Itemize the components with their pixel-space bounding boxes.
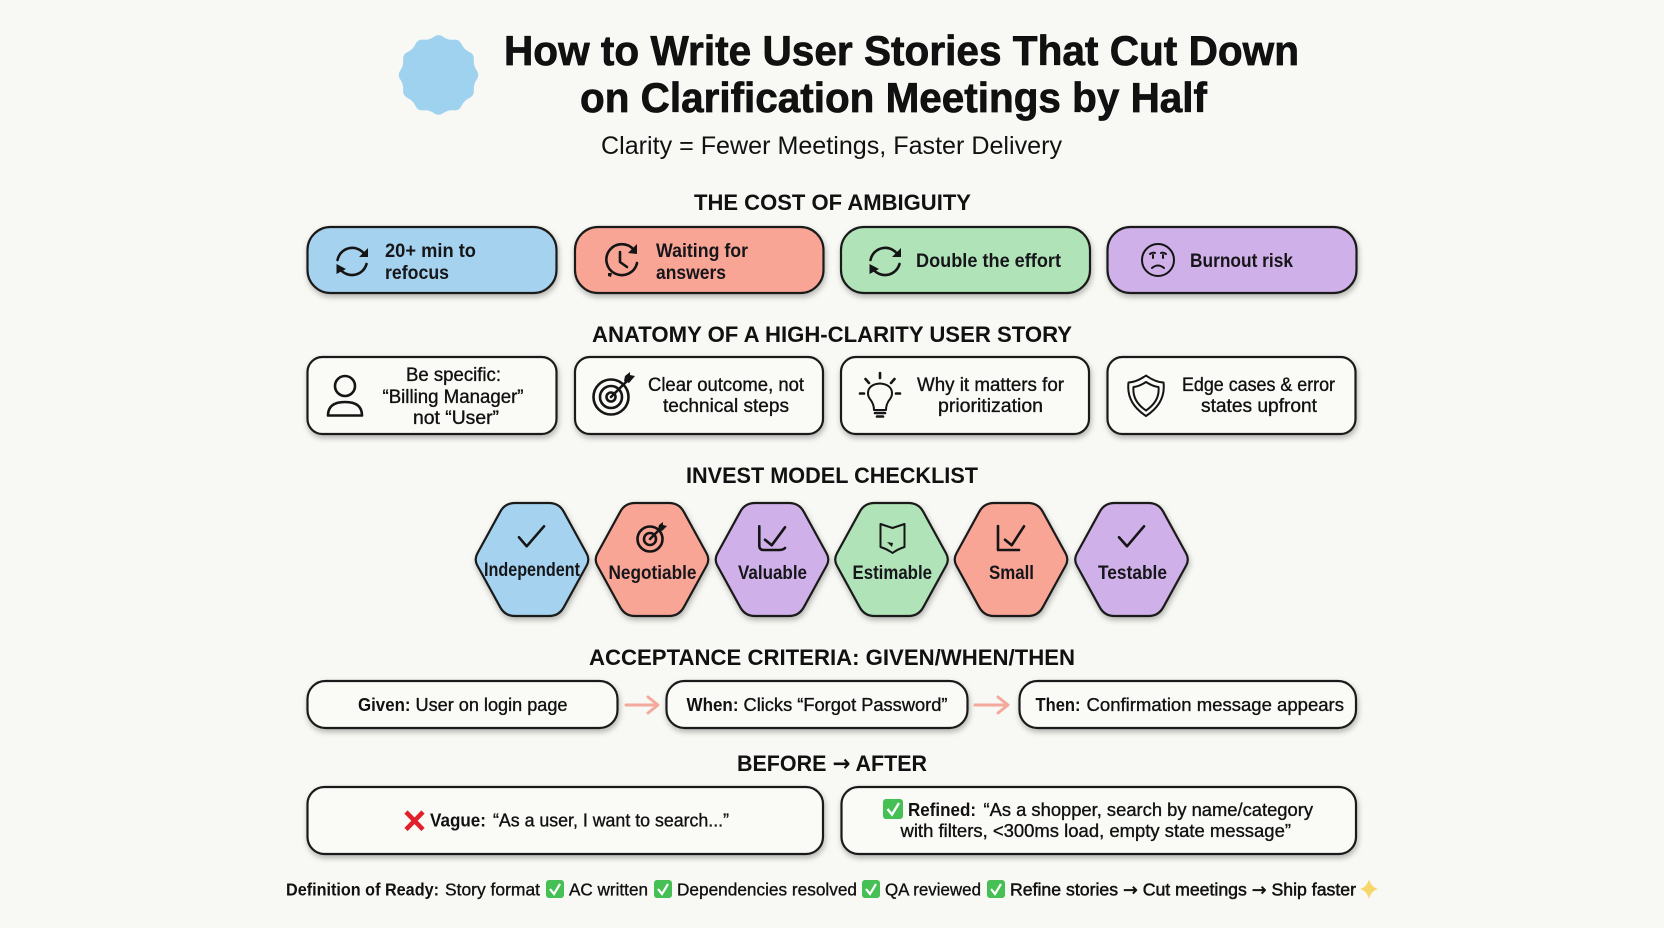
label: refocus (385, 262, 449, 284)
hexagon: testable (1075, 503, 1188, 616)
footer: definition of ready: Story format (445, 880, 540, 900)
panel: invest hexagons (476, 503, 1188, 616)
icon: sparkle (1360, 879, 1378, 899)
icon: green check (654, 880, 672, 898)
label: Testable (1098, 562, 1167, 584)
icon: chart check (759, 526, 785, 550)
box: refined (842, 787, 1356, 854)
label: Vague: (430, 810, 486, 830)
arrow: when to then (975, 697, 1008, 713)
label (1182, 375, 1336, 417)
label: prioritization (938, 396, 1043, 417)
pill: double the effort (841, 227, 1090, 293)
icon: check (1119, 526, 1144, 546)
label: “Billing Manager” (382, 387, 524, 408)
title (504, 27, 1299, 121)
footer: definition of ready: AC written (569, 880, 648, 900)
label: Double the effort (916, 250, 1061, 272)
icon: red cross (406, 812, 423, 830)
footer: definition of ready (286, 879, 1378, 900)
footer: definition of ready: Dependencies resolved (677, 880, 857, 900)
label: Burnout risk (1190, 250, 1293, 272)
card: edge cases (1108, 357, 1356, 434)
arrow: given to when (626, 697, 658, 713)
card: why it matters (841, 357, 1089, 434)
label: with filters, <300ms load, empty state message” (900, 820, 1291, 841)
label: Given: (358, 694, 410, 715)
label: Clicks “Forgot Password” (744, 694, 948, 715)
footer: definition of ready: Definition of Ready: (286, 880, 439, 900)
icon: green check (546, 880, 564, 898)
title: How to Write User Stories That Cut Down (504, 27, 1299, 74)
label: answers (656, 262, 726, 284)
pill: 20+ min to refocus (308, 227, 556, 293)
label: “As a user, I want to search...” (493, 810, 729, 830)
label: Clear outcome, not (648, 375, 805, 396)
box: then (1020, 681, 1356, 728)
heading: the cost of ambiguity: THE COST OF AMBIGUITY (694, 190, 971, 215)
label: Independent (484, 559, 580, 581)
icon: target (594, 372, 635, 414)
label: Refined: (908, 799, 976, 820)
heading: before after: BEFORE → AFTER (737, 751, 927, 777)
label (648, 375, 805, 417)
label: “As a shopper, search by name/category (984, 799, 1314, 820)
icon: bookmark shield (880, 524, 904, 553)
label: Negotiable (608, 562, 697, 584)
icon: light bulb (860, 373, 900, 416)
title: on Clarification Meetings by Half (580, 74, 1208, 121)
label (385, 240, 476, 284)
label: Small (989, 562, 1034, 584)
icon: sad face (1142, 244, 1174, 276)
heading: acceptance criteria: ACCEPTANCE CRITERIA: GIVEN/WHEN/THEN (589, 645, 1075, 670)
icon: green check (883, 799, 903, 819)
box: when (666, 681, 968, 728)
label: not “User” (413, 408, 499, 429)
icon: check (519, 526, 544, 546)
hexagon: estimable (835, 503, 948, 616)
card: clear outcome (575, 357, 823, 434)
hexagon: valuable (716, 503, 828, 616)
icon: person (328, 376, 362, 416)
label (900, 799, 1314, 841)
heading: invest: INVEST MODEL CHECKLIST (686, 463, 978, 488)
label (656, 240, 748, 284)
label (382, 365, 524, 429)
icon: green check (862, 880, 880, 898)
footer: definition of ready: QA reviewed (885, 880, 981, 900)
panel: cost of ambiguity pills (308, 227, 1356, 293)
hexagon: small (955, 503, 1067, 616)
heading: anatomy: ANATOMY OF A HIGH-CLARITY USER STORY (592, 322, 1072, 347)
panel: anatomy cards (308, 357, 1356, 434)
footer: definition of ready: Refine stories → Cut meetings → Ship faster (1010, 880, 1356, 900)
label: Edge cases & error (1182, 375, 1336, 396)
icon: blue scalloped badge (399, 35, 478, 115)
label: Estimable (852, 562, 932, 584)
pill: waiting for answers (575, 227, 824, 293)
box: given (308, 681, 618, 728)
icon: refresh arrows (870, 248, 901, 275)
panel: before after (308, 787, 1356, 854)
label: Be specific: (406, 365, 501, 386)
label: Valuable (738, 562, 807, 584)
icon: clock with arrow (606, 244, 637, 277)
label: technical steps (663, 396, 789, 417)
label: 20+ min to (385, 240, 476, 262)
box: vague (308, 787, 823, 854)
icon: chart check (998, 526, 1024, 550)
label: When: (686, 694, 738, 715)
label: states upfront (1201, 396, 1318, 417)
icon: refresh arrows (336, 248, 368, 275)
panel: given when then flow (308, 681, 1356, 728)
label: Waiting for (656, 240, 748, 262)
label: Why it matters for (917, 375, 1065, 396)
label: Then: (1036, 694, 1080, 715)
label: Confirmation message appears (1086, 694, 1344, 715)
hexagon: independent (476, 503, 588, 616)
label (917, 375, 1065, 417)
card: be specific (308, 357, 556, 434)
label: User on login page (416, 694, 568, 715)
subtitle: Clarity = Fewer Meetings, Faster Delivery (601, 132, 1063, 160)
icon: green check (987, 880, 1005, 898)
hexagon: negotiable (596, 503, 708, 616)
pill: burnout risk (1108, 227, 1356, 293)
icon: target (638, 522, 667, 552)
icon: shield (1128, 376, 1164, 416)
